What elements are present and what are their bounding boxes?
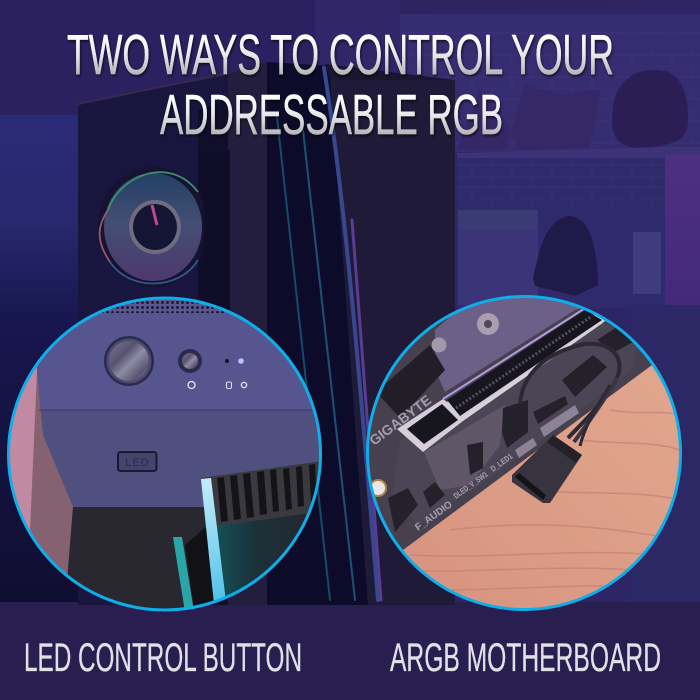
silkscreen bar V D G bbox=[515, 438, 537, 458]
dark front shadow bbox=[185, 527, 214, 606]
background: wall behind top centre bbox=[315, 0, 405, 70]
case: rgb strips bbox=[277, 68, 381, 600]
front bevel surface bbox=[39, 410, 330, 507]
LED button: LED bbox=[125, 457, 150, 469]
ARGB connector cable bbox=[512, 344, 619, 503]
bright light bar bbox=[201, 478, 226, 604]
title bbox=[67, 23, 614, 147]
white silkscreen labels bbox=[413, 451, 515, 533]
brown side of case bbox=[30, 372, 73, 590]
background: lower shelf bricks bbox=[457, 158, 665, 308]
panel: LED control button photo circle bbox=[0, 290, 330, 620]
pcie long slot teeth bbox=[456, 316, 592, 408]
case: dark internal region bbox=[198, 100, 228, 605]
background: curtain top left bbox=[0, 0, 320, 118]
speaker grille bbox=[102, 301, 228, 313]
background: headset on shelf bbox=[612, 70, 688, 148]
background: box below bbox=[458, 230, 538, 305]
white silkscreen labels: F_AUDIO bbox=[413, 499, 455, 533]
background: top shelf edge bbox=[400, 0, 700, 13]
wood desk surface bbox=[403, 365, 679, 608]
case: front right panel bbox=[330, 78, 455, 605]
case: front black section bbox=[267, 62, 372, 605]
panel: ARGB motherboard photo circle bbox=[360, 290, 690, 620]
silkscreen bar 12V G R B bbox=[540, 405, 579, 437]
jumpers and headers bbox=[388, 322, 640, 532]
purple slot upper line bbox=[443, 305, 590, 399]
vent block bbox=[201, 462, 319, 526]
background: lower shelf brick texture bbox=[457, 158, 665, 208]
circle border bbox=[8, 298, 320, 610]
teal light bar bbox=[173, 537, 193, 608]
connector plug bbox=[512, 435, 582, 503]
white silkscreen labels: D_LED1 bbox=[489, 451, 515, 474]
circle border bbox=[368, 296, 680, 610]
background: upper shelf bricks right bbox=[400, 14, 700, 152]
icon: round power button bbox=[104, 336, 154, 386]
white lower slot edge bbox=[462, 322, 602, 420]
icon: drive symbol bbox=[226, 382, 232, 388]
mounting hole bbox=[477, 313, 499, 335]
wood grain bbox=[400, 410, 680, 590]
background: lower right wall bbox=[630, 305, 700, 605]
icon: small reset button bbox=[178, 349, 202, 373]
lower right panel with teal glow bbox=[217, 513, 308, 596]
background: blue wall left bbox=[0, 115, 80, 605]
cable wires bbox=[520, 344, 619, 438]
case: glass side panel bbox=[78, 75, 228, 605]
purple traces area bbox=[435, 298, 580, 392]
icon: power led symbol bbox=[241, 382, 247, 388]
top lid surface bbox=[37, 296, 330, 410]
black lower front bbox=[68, 507, 206, 608]
icon: power symbol bbox=[188, 382, 195, 388]
translucent shroud bbox=[424, 405, 505, 490]
background: floor and desk bbox=[0, 602, 700, 700]
background: shelf side right bbox=[665, 155, 700, 305]
background: box on lower shelf bbox=[458, 210, 538, 230]
indicator: black led dot bbox=[225, 359, 229, 363]
case: top edge highlight bbox=[78, 73, 228, 104]
pcie bracket white border bbox=[397, 314, 606, 452]
pcie long slot bbox=[447, 310, 602, 416]
gigabyte silkscreen logo: GIGABYTE bbox=[366, 392, 434, 448]
lower board shade below slot bbox=[392, 322, 640, 525]
background: helmet figure bbox=[533, 216, 598, 296]
plug strap bbox=[547, 435, 582, 463]
motherboard bbox=[369, 308, 652, 550]
case: vents top bbox=[325, 64, 455, 80]
background: upper shelf brick texture bbox=[400, 30, 700, 150]
background: lower shelf board bbox=[457, 147, 700, 158]
pcie short slot bbox=[407, 404, 458, 444]
white silkscreen labels: DLED_V_SW1 bbox=[452, 470, 490, 501]
lid seam bbox=[39, 410, 313, 411]
silver capacitor bbox=[370, 480, 386, 496]
PC case bbox=[78, 62, 455, 605]
pink wall at left bbox=[10, 367, 37, 540]
case: fan with rgb ring bbox=[98, 150, 230, 310]
LED button bbox=[118, 452, 156, 471]
background: figures on shelf bbox=[457, 85, 600, 150]
case: pillar bbox=[228, 62, 267, 605]
caption: LED control button: LED CONTROL BUTTON bbox=[24, 636, 302, 680]
indicator: blue led dot bbox=[238, 358, 244, 364]
plug opening bbox=[515, 473, 546, 500]
screw bbox=[432, 338, 446, 352]
black pcie cluster bbox=[376, 345, 445, 418]
background: white toy figure bbox=[633, 232, 661, 294]
